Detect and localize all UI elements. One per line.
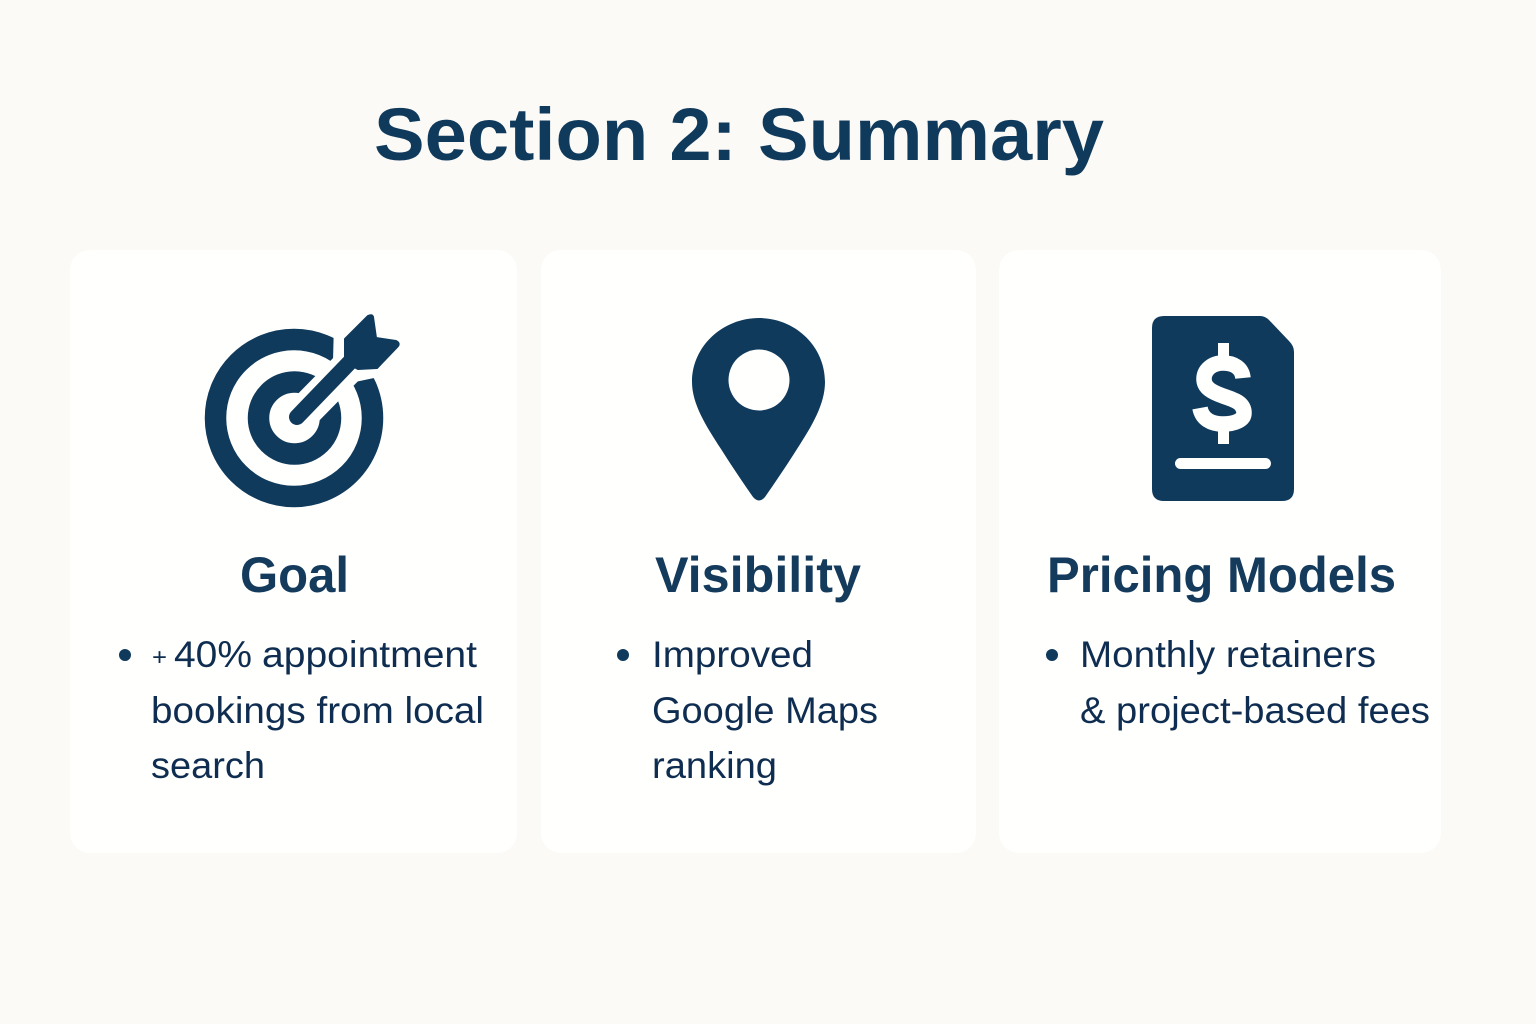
- bullet list: goal: +: [152, 644, 167, 671]
- panel: visibility: [541, 250, 976, 853]
- title: Section 2: Summary: [374, 93, 1104, 176]
- bullet list: goal: 40%: [174, 634, 252, 675]
- icon: price document: [1152, 316, 1294, 501]
- bullet list: pricing models: & project-based fees: [1080, 690, 1430, 731]
- bullet list: visibility: Improved: [652, 634, 813, 675]
- bullet list: visibility: ranking: [652, 745, 777, 786]
- bullet list: visibility: Google Maps: [652, 690, 878, 731]
- bullet list: visibility: [617, 634, 878, 786]
- heading: visibility: Visibility: [655, 547, 861, 603]
- panel: pricing models: [999, 250, 1441, 853]
- bullet list: pricing models: [1046, 634, 1430, 731]
- panel: goal: [70, 250, 517, 853]
- icon: target with arrow: [216, 315, 420, 496]
- icon: map pin: [692, 318, 825, 500]
- bullet list: goal: search: [151, 745, 265, 786]
- heading: pricing models: Pricing Models: [1047, 547, 1396, 603]
- bullet list: pricing models: Monthly retainers: [1080, 634, 1376, 675]
- heading: goal: Goal: [240, 547, 349, 603]
- bullet list: goal: bookings from local: [151, 690, 484, 731]
- bullet list: goal: appointment: [262, 634, 478, 675]
- bullet list: goal: [119, 634, 484, 786]
